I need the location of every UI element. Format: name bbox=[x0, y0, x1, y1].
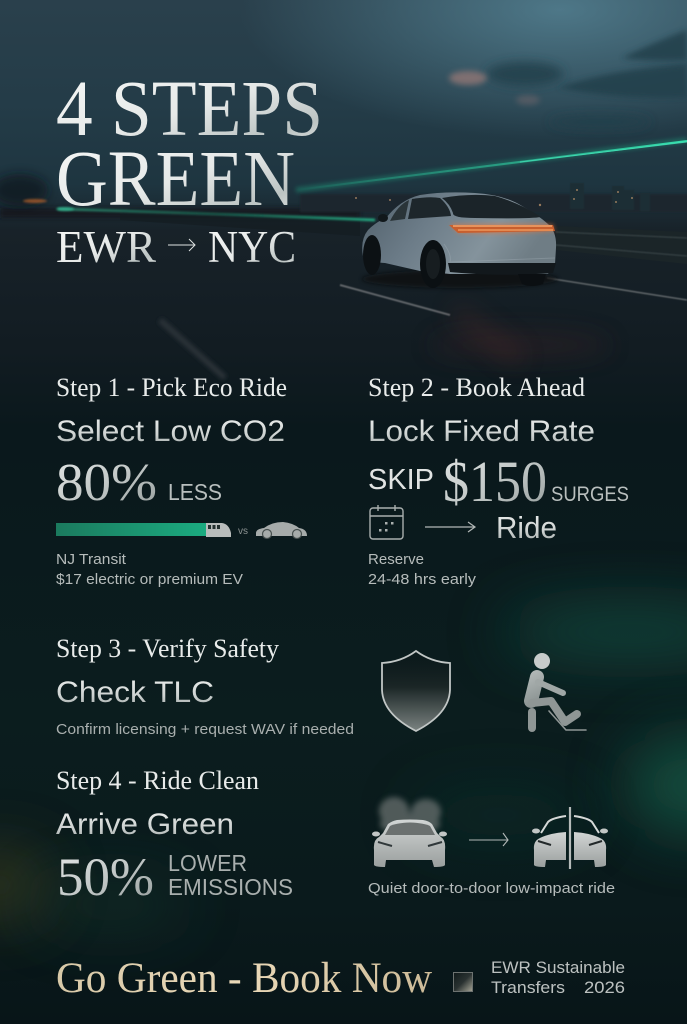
title: 4 STEPS bbox=[56, 66, 323, 153]
icon: seated passenger bbox=[531, 653, 586, 730]
green light beams bbox=[23, 140, 687, 220]
highway railing and road bbox=[120, 214, 687, 378]
icon: square mark bbox=[454, 972, 472, 992]
step 3 heading: Step 3 - Verify Safety bbox=[56, 634, 279, 663]
comparison bar: vs bbox=[238, 526, 248, 537]
car: rear view with tail light bbox=[362, 192, 558, 288]
panel: step 2 bbox=[368, 373, 629, 588]
skip $150 surges stat: SKIP bbox=[368, 464, 434, 496]
skip $150 surges stat: SURGES bbox=[551, 483, 629, 506]
step 2 heading: Step 2 - Book Ahead bbox=[368, 373, 585, 402]
step 2 note: 24-48 hrs early bbox=[368, 571, 477, 588]
ride label: Ride bbox=[496, 510, 557, 545]
icon: car bbox=[256, 522, 307, 538]
step 4 note: Quiet door-to-door low-impact ride bbox=[368, 880, 615, 897]
footer bbox=[56, 955, 630, 1002]
panel: step 3 bbox=[56, 634, 586, 738]
panel: step 4 bbox=[56, 766, 615, 907]
title bbox=[56, 66, 323, 272]
comparison bar bbox=[56, 522, 307, 538]
step 3 note: Confirm licensing + request WAV if needed bbox=[56, 722, 354, 738]
footer note: 2026 bbox=[584, 979, 625, 997]
step 1 subheading: Select Low CO2 bbox=[56, 415, 285, 448]
title: EWR bbox=[56, 222, 156, 272]
skip $150 surges stat: $150 bbox=[443, 449, 547, 514]
80% less stat bbox=[56, 454, 222, 512]
80% less stat: 80% bbox=[56, 454, 157, 512]
step 1 note: NJ Transit bbox=[56, 551, 127, 568]
80% less stat: LESS bbox=[168, 479, 222, 505]
city skyline bbox=[300, 183, 687, 212]
arrow bbox=[425, 522, 475, 532]
title: NYC bbox=[208, 222, 296, 272]
panel: step 1 bbox=[56, 373, 307, 588]
step 1 note: $17 electric or premium EV bbox=[56, 571, 243, 588]
step 4 heading: Step 4 - Ride Clean bbox=[56, 766, 259, 795]
title: GREEN bbox=[56, 136, 295, 223]
step 1 heading: Step 1 - Pick Eco Ride bbox=[56, 373, 287, 402]
icon: train bbox=[206, 523, 231, 537]
icon: exhaust car bbox=[372, 797, 447, 867]
step 3 subheading: Check TLC bbox=[56, 676, 214, 709]
icon: calendar bbox=[370, 505, 403, 539]
step 2 note: Reserve bbox=[368, 551, 424, 568]
call to action: Go Green - Book Now bbox=[56, 955, 432, 1002]
50% lower emissions stat: EMISSIONS bbox=[168, 874, 293, 900]
50% lower emissions stat: LOWER bbox=[168, 850, 247, 876]
50% lower emissions stat: 50% bbox=[57, 847, 154, 907]
step 4 subheading: Arrive Green bbox=[56, 808, 234, 841]
50% lower emissions stat bbox=[57, 847, 293, 907]
icon: split clean car bbox=[532, 807, 608, 869]
skip $150 surges stat bbox=[368, 449, 629, 514]
icon: shield bbox=[382, 651, 450, 731]
footer note: Transfers bbox=[491, 979, 565, 997]
step 2 subheading: Lock Fixed Rate bbox=[368, 415, 595, 448]
arrow bbox=[469, 833, 508, 846]
footer note: EWR Sustainable bbox=[491, 959, 625, 977]
clouds bbox=[449, 30, 687, 129]
